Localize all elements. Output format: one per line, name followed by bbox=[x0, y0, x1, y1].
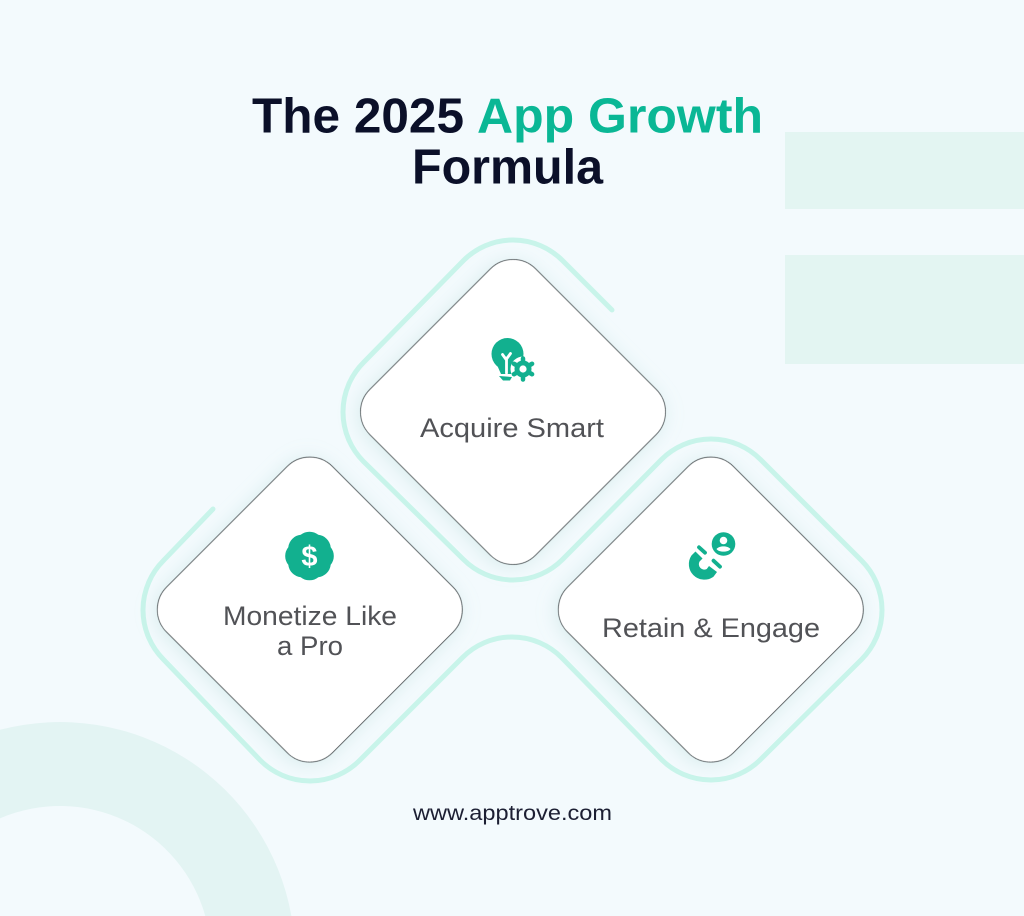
card: Monetize Like a Pro bbox=[144, 444, 476, 775]
card: Retain & Engage bbox=[545, 444, 877, 775]
icon: magnet with user bbox=[694, 532, 735, 575]
label: Acquire Smart: Acquire Smart bbox=[420, 413, 605, 443]
icon: light bulb with gear bbox=[492, 338, 536, 382]
card: Acquire Smart bbox=[347, 246, 679, 578]
label: Monetize Like a Pro bbox=[223, 601, 397, 661]
title: Formula bbox=[412, 140, 604, 194]
title bbox=[252, 90, 763, 194]
decorative arc: bottom left bbox=[0, 722, 291, 916]
title: App Growth bbox=[477, 90, 763, 144]
icon: dollar badge: $ bbox=[301, 541, 318, 573]
label: Monetize Like a Pro: a Pro bbox=[277, 631, 343, 661]
decorative bar: upper right bbox=[785, 132, 1024, 209]
label: Monetize Like a Pro: Monetize Like bbox=[223, 601, 397, 631]
decorative bar: lower right bbox=[785, 255, 1024, 364]
icon: dollar badge bbox=[285, 532, 334, 580]
connecting outline around the diamonds bbox=[143, 240, 882, 781]
title: The 2025 bbox=[252, 90, 464, 144]
label: Retain & Engage: Retain & Engage bbox=[602, 613, 820, 643]
website url: www.apptrove.com bbox=[412, 802, 612, 825]
